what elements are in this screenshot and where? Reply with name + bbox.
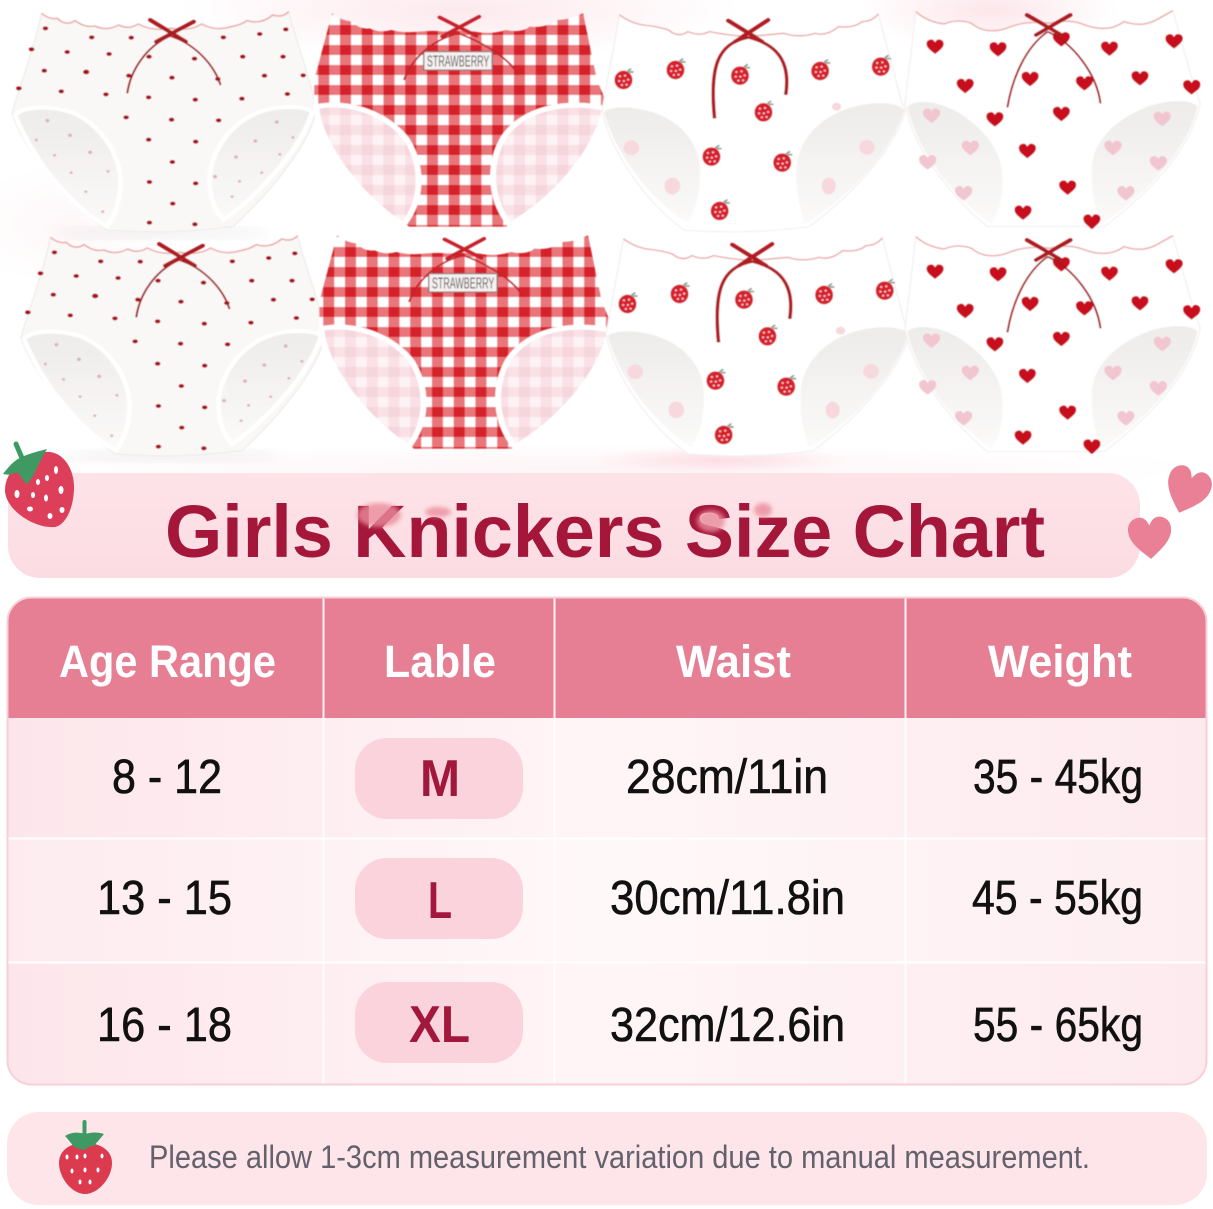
title: Girls Knickers Size Chart [165, 490, 1045, 573]
product photo: knickers top row [12, 11, 1200, 232]
knickers: polka dot [12, 12, 316, 232]
table background and rows [7, 597, 1207, 1085]
table header: Weight [988, 636, 1132, 687]
size labels: M [420, 750, 460, 808]
product photo: knickers bottom row [21, 235, 1200, 456]
footnote panel [7, 1112, 1207, 1205]
icon: heart large [1158, 462, 1213, 520]
blurred pink smudges on title [357, 503, 772, 532]
row: 8 - 12: 8 - 12 [112, 751, 222, 804]
size labels: XL [409, 996, 470, 1054]
knickers: polka dot, row two [21, 236, 325, 456]
row: 13 - 15: 13 - 15 [97, 872, 232, 925]
knickers: heart print, row two [905, 236, 1200, 454]
row: 13 - 15: 45 - 55kg [972, 872, 1143, 925]
size labels [409, 750, 470, 1054]
icon: strawberry top left [3, 444, 74, 527]
knickers: strawberry print, row two [606, 238, 909, 456]
table header: Waist [676, 636, 791, 687]
table header: Age Range [59, 636, 276, 687]
knickers: gingham strawberry, row two [319, 235, 612, 449]
row: 16 - 18: 32cm/12.6in [610, 999, 845, 1052]
knickers: gingham strawberry [314, 13, 607, 227]
title banner [8, 473, 1140, 578]
icon: strawberry footnote [59, 1122, 112, 1194]
size label pills [355, 738, 523, 1063]
footnote text: Please allow 1-3cm measurement variation due to manual measurement. [149, 1139, 1090, 1175]
row: 16 - 18: 55 - 65kg [973, 999, 1143, 1052]
row: 16 - 18: 16 - 18 [97, 999, 232, 1052]
row: 8 - 12: 28cm/11in [626, 751, 828, 804]
icon: heart small [1127, 516, 1173, 560]
background glow [0, 0, 1213, 492]
size table [7, 597, 1207, 1085]
size labels: L [428, 872, 452, 930]
row: 16 - 18 [97, 999, 1143, 1052]
row: 8 - 12: 35 - 45kg [973, 751, 1143, 804]
table header: Lable [384, 636, 496, 687]
knickers: strawberry print [602, 14, 905, 232]
row: 13 - 15: 30cm/11.8in [610, 872, 845, 925]
knickers: heart print [905, 11, 1200, 229]
row: 13 - 15 [97, 872, 1143, 925]
row: 8 - 12 [112, 751, 1143, 804]
table header [59, 636, 1132, 687]
